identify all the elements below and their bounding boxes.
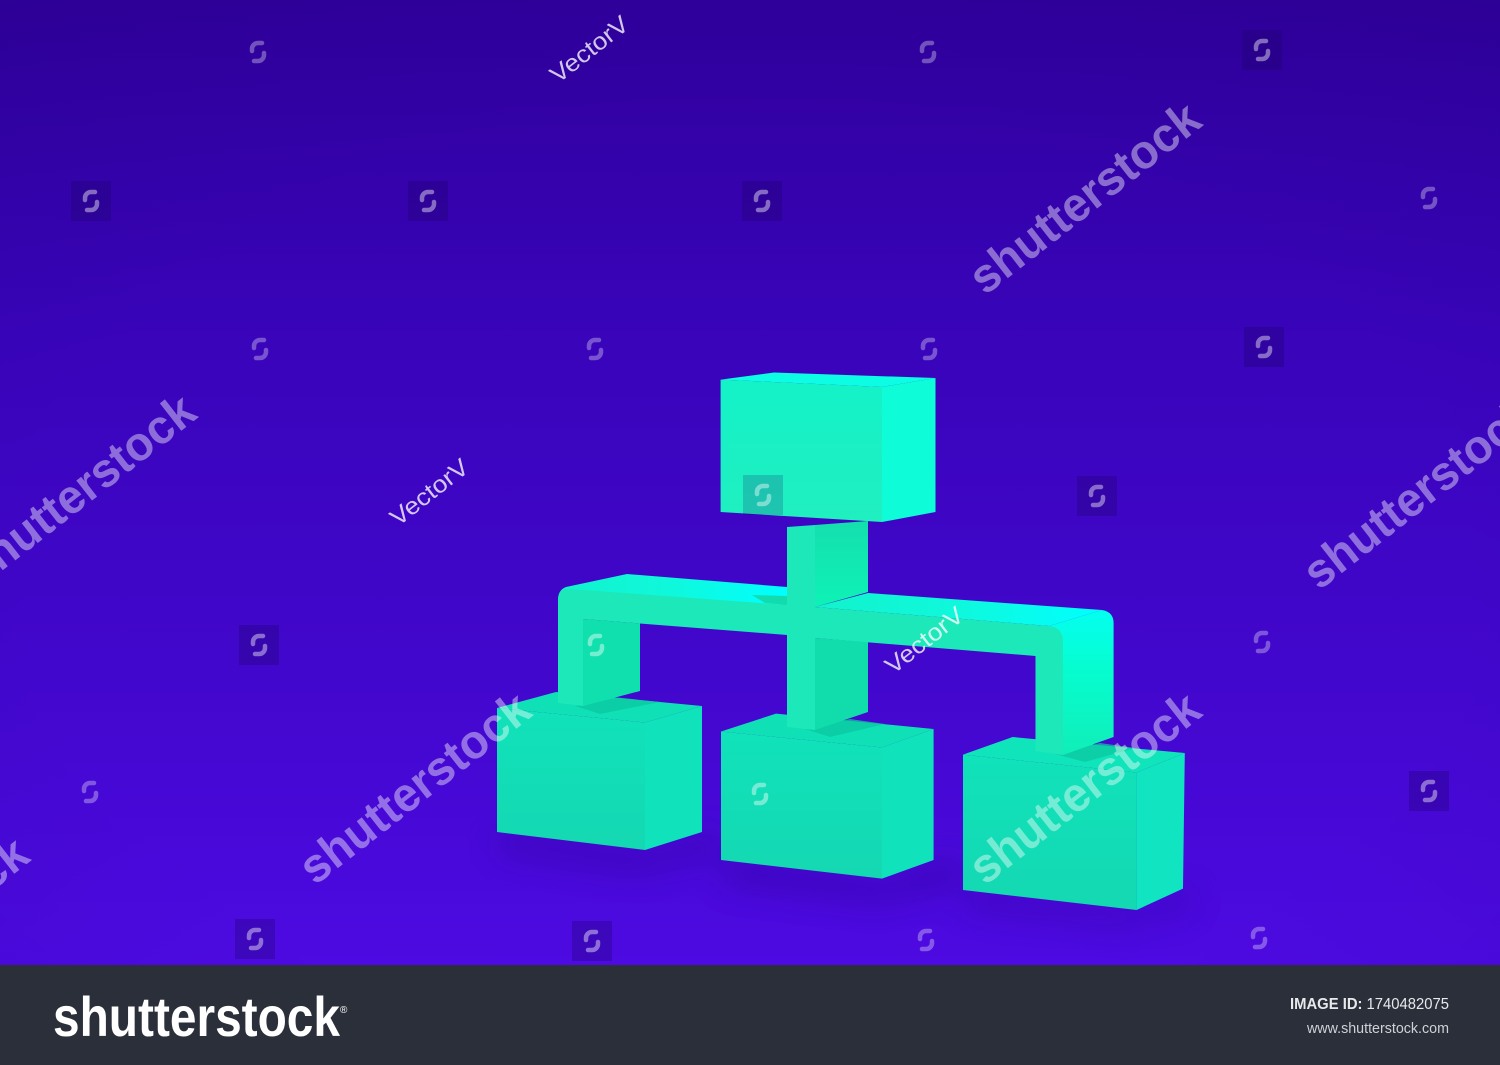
logo tile 1	[71, 181, 111, 221]
logo tile 9	[235, 919, 275, 959]
logo tile 10	[572, 921, 612, 961]
logo mark on middle box	[754, 785, 766, 803]
connector front face	[558, 525, 1063, 755]
logo tile 6	[1077, 476, 1117, 516]
plain logo marks	[84, 43, 1435, 949]
stem side lower	[815, 638, 868, 730]
logo tile 7	[239, 625, 279, 665]
logo tile 4	[1242, 30, 1282, 70]
contributor name center: VectorV	[880, 602, 969, 680]
logo tile 3	[742, 181, 782, 221]
lower right box	[963, 737, 1185, 910]
logo tile 5	[1244, 327, 1284, 367]
wordmark upper right: shutterstock	[959, 92, 1211, 305]
lower middle box	[721, 714, 934, 879]
contributor name top: VectorV	[545, 11, 634, 89]
stem side upper	[815, 521, 868, 607]
right leg side	[1049, 610, 1114, 755]
watermark: contributor names	[385, 11, 969, 680]
logo tile on top box	[743, 475, 783, 515]
logo mark on left leg	[590, 636, 602, 654]
image id: IMAGE ID: 1740482075	[1290, 996, 1449, 1013]
top box	[721, 372, 936, 522]
logo tile 8	[1409, 771, 1449, 811]
wordmark lower right: shutterstock	[959, 682, 1211, 895]
logo tile 2	[408, 181, 448, 221]
floor shadows	[500, 835, 1190, 925]
website: www.shutterstock.com	[1306, 1020, 1449, 1037]
contact shadows on lower boxes	[575, 698, 1135, 762]
logo marks over the icon	[590, 475, 783, 803]
contributor name left: VectorV	[385, 454, 474, 532]
hierarchy diagram 3D icon	[497, 372, 1185, 910]
registered mark: ®	[340, 1005, 348, 1016]
connector inner side faces	[583, 521, 1114, 755]
wordmark center: shutterstock	[289, 682, 541, 895]
footer bar	[0, 965, 1500, 1065]
bar top faces	[558, 574, 1102, 626]
lower left box	[497, 692, 702, 850]
left leg side	[583, 619, 640, 706]
footer logo: shutterstock	[53, 985, 341, 1048]
